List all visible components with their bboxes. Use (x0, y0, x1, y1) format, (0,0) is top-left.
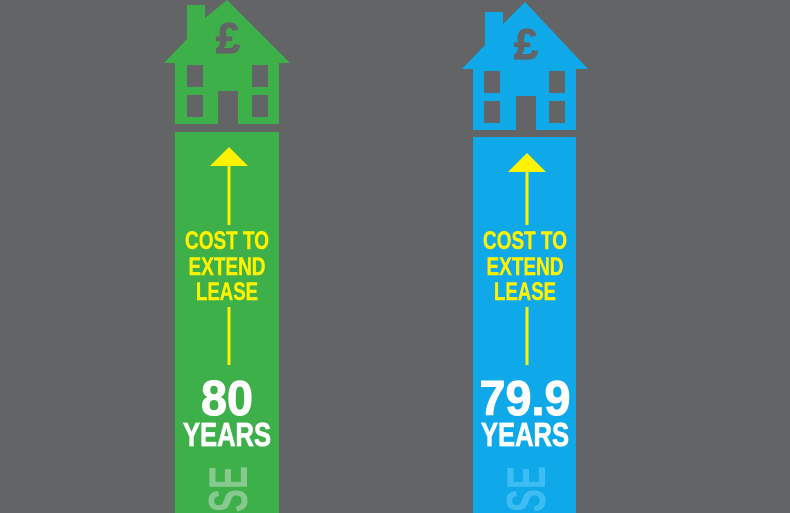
cost to extend lease label (483, 227, 567, 306)
cost to extend lease label: EXTEND (188, 253, 266, 281)
arrow up to top of bar (210, 147, 248, 225)
value: 80 years (183, 372, 271, 453)
green lease bar (175, 132, 279, 513)
cost to extend lease label: COST TO (185, 227, 269, 255)
cost to extend lease label: LEASE (494, 278, 556, 306)
icon: green house with pound sign (164, 0, 290, 124)
value: 80 years: YEARS (183, 416, 271, 453)
arrow stem lower (228, 307, 230, 365)
value: 79.9 years (480, 372, 570, 453)
faded rotated lease word: SE (495, 466, 557, 512)
cost to extend lease label: COST TO (483, 227, 567, 255)
panel: green 80 years column (164, 0, 290, 513)
icon: green house with pound sign: £ (216, 15, 240, 63)
arrow stem lower (526, 307, 528, 365)
cost to extend lease label: EXTEND (486, 253, 564, 281)
blue lease bar (473, 137, 576, 513)
cost to extend lease label: LEASE (196, 278, 258, 306)
icon: blue house with pound sign: £ (514, 21, 538, 69)
value: 79.9 years: YEARS (481, 416, 569, 453)
panel: blue 79.9 years column (462, 2, 588, 513)
value: 79.9 years: 79.9 (480, 372, 570, 426)
cost to extend lease label (185, 227, 269, 306)
icon: blue house with pound sign (462, 2, 588, 130)
value: 80 years: 80 (201, 372, 253, 426)
arrow up to top of bar (508, 153, 546, 225)
faded rotated lease word: SE (197, 466, 259, 512)
